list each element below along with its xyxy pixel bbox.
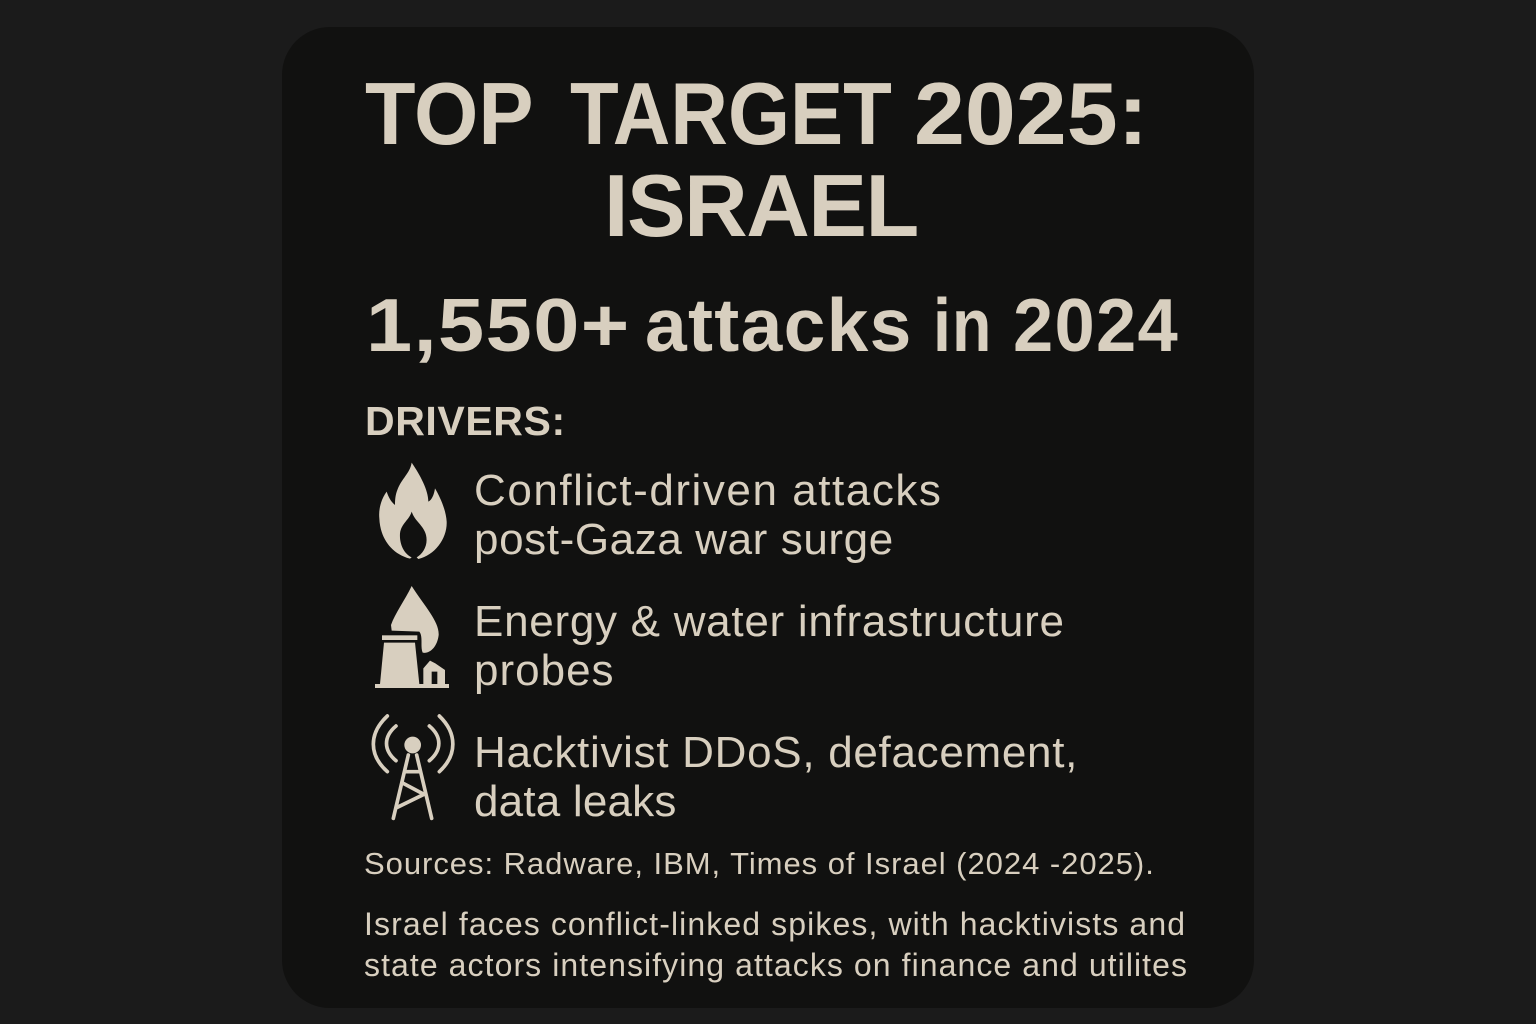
driver 1 text: post-Gaza war surge	[474, 515, 894, 564]
title line 2: ISRAEL	[604, 156, 918, 255]
title line 1: TARGET	[570, 64, 892, 163]
icon: flame	[379, 462, 447, 559]
driver 2 text	[474, 597, 1065, 695]
icon: signal tower	[372, 714, 455, 820]
summary text: Israel faces conflict-linked spikes, with hacktivists and	[364, 906, 1186, 942]
driver 2 text: Energy & water infrastructure	[474, 597, 1065, 646]
summary text: state actors intensifying attacks on finance and utilites	[364, 947, 1188, 983]
headline statistic: 1,550+	[366, 283, 631, 367]
driver 3 text: Hacktivist DDoS, defacement,	[474, 728, 1078, 777]
title line 1: TOP	[365, 64, 534, 163]
driver 3 text: data leaks	[474, 777, 677, 826]
panel: main card	[282, 27, 1254, 1008]
summary text	[364, 906, 1188, 983]
headline statistic: attacks	[645, 283, 913, 367]
headline statistic: 2024	[1013, 283, 1179, 367]
driver 1 text: Conflict-driven attacks	[474, 466, 942, 515]
sources note: Sources: Radware, IBM, Times of Israel (2024 -2025).	[364, 846, 1155, 881]
driver 1 text	[474, 466, 942, 564]
driver 3 text	[474, 728, 1078, 826]
title line 1: 2025:	[914, 64, 1148, 163]
driver 2 text: probes	[474, 646, 615, 695]
drivers heading: DRIVERS:	[365, 398, 566, 444]
title line 1	[365, 64, 1148, 163]
icon: power plant with drop	[375, 586, 449, 688]
headline statistic	[366, 283, 1179, 367]
headline statistic: in	[933, 283, 993, 367]
